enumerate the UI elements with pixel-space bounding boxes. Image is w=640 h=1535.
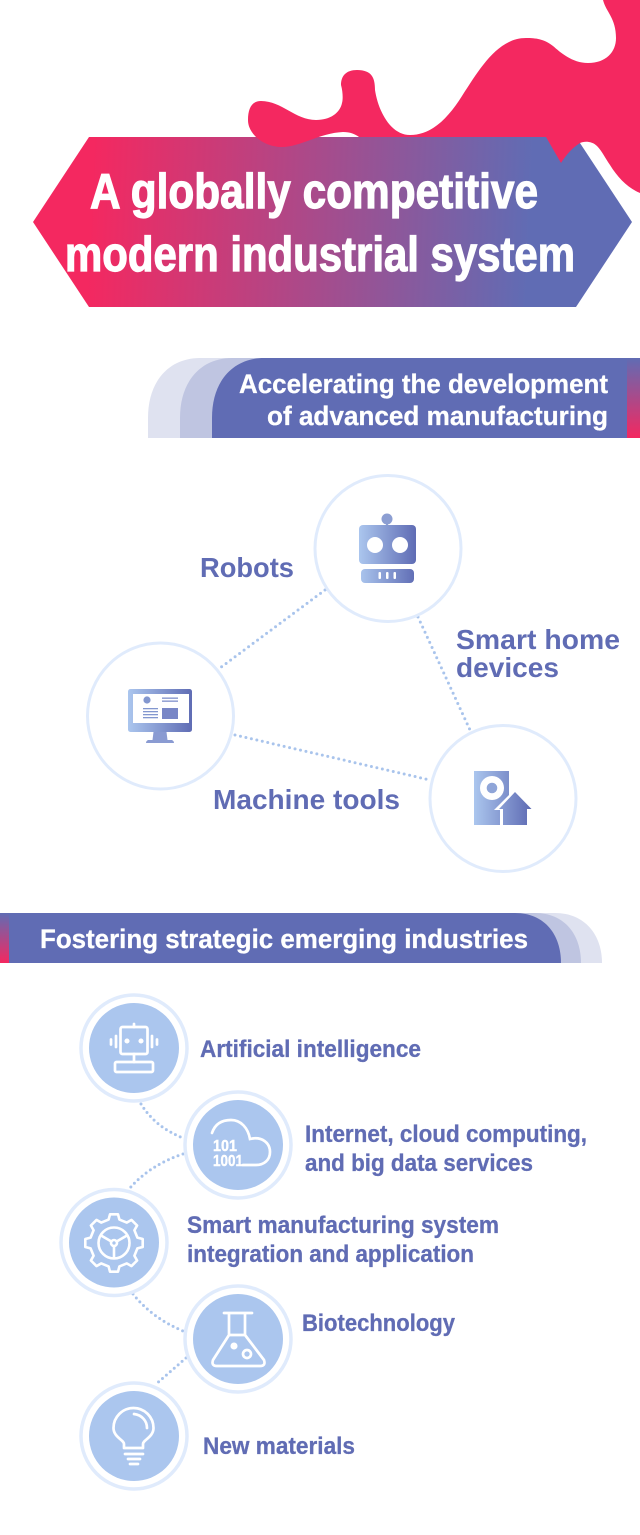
label: smart home devices <box>456 624 620 683</box>
label: internet, cloud computing: Internet, cloud computing, <box>305 1121 587 1148</box>
icon: robot head <box>359 514 416 583</box>
header text: Accelerating the development <box>239 369 608 399</box>
label: smart manufacturing <box>187 1212 499 1268</box>
node: biotechnology <box>185 1286 291 1392</box>
icon: speaker and house <box>474 771 536 827</box>
title: A globally competitive <box>90 165 538 219</box>
icon: data cloud: 1001 <box>213 1153 243 1170</box>
node: smart manufacturing <box>61 1190 167 1296</box>
label: smart manufacturing: integration and application <box>187 1241 474 1268</box>
dotted connectors: emerging industries <box>130 1104 186 1385</box>
node: smart home devices <box>430 726 576 872</box>
icon: data cloud <box>212 1120 270 1170</box>
section header: emerging industries <box>0 913 602 963</box>
icon: flask <box>212 1313 264 1366</box>
label: robots: Robots <box>200 552 294 583</box>
node: internet and cloud <box>185 1092 291 1198</box>
icon: light bulb <box>114 1408 154 1464</box>
header text: Fostering strategic emerging industries <box>40 924 528 954</box>
label: internet, cloud computing: and big data services <box>305 1150 533 1177</box>
dotted connectors: advanced manufacturing <box>220 590 470 780</box>
header accent stripe <box>0 913 9 963</box>
label: smart home devices: devices <box>456 652 559 683</box>
label: internet, cloud computing <box>305 1121 587 1177</box>
node: machine tools <box>88 643 234 789</box>
label: biotechnology: Biotechnology <box>302 1310 456 1337</box>
title <box>65 165 575 282</box>
header text: of advanced manufacturing <box>267 401 608 431</box>
title banner: gradient hexagon <box>33 137 632 307</box>
icon: computer monitor <box>128 689 192 743</box>
icon: AI robot <box>111 1024 157 1072</box>
header text <box>239 369 608 431</box>
label: smart home devices: Smart home <box>456 624 620 655</box>
section header: advanced manufacturing <box>148 358 640 438</box>
label: new materials: New materials <box>203 1433 355 1460</box>
label: machine tools: Machine tools <box>213 784 400 815</box>
label: smart manufacturing: Smart manufacturing system <box>187 1212 499 1239</box>
node: artificial intelligence <box>81 995 187 1101</box>
decorative pink blob <box>248 0 640 193</box>
node: robots <box>315 476 461 622</box>
node: new materials <box>81 1383 187 1489</box>
header accent stripe <box>627 358 640 438</box>
icon: gear with wheel <box>85 1214 143 1272</box>
label: artificial intelligence: Artificial intelligence <box>200 1036 421 1063</box>
icon: data cloud: 101 <box>213 1138 237 1155</box>
